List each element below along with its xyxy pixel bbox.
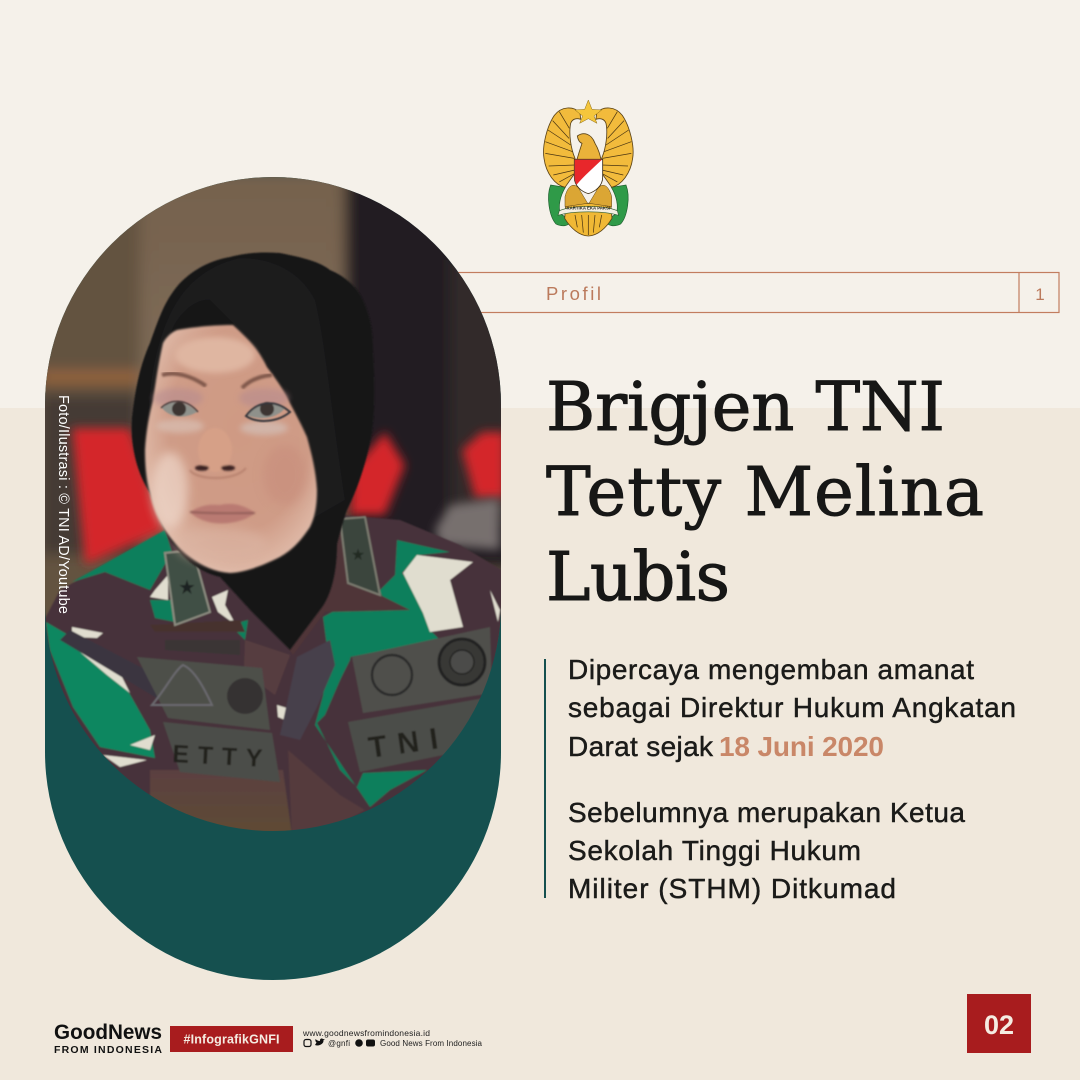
background: lower band xyxy=(0,408,1080,1080)
green capsule xyxy=(45,177,501,980)
rank insignia: right xyxy=(340,517,380,595)
eyebrows xyxy=(162,374,206,386)
uniform xyxy=(40,515,505,840)
icon: ribbon: KARTIKA EKA PAKSI xyxy=(567,205,610,210)
lips xyxy=(190,504,255,523)
hijab xyxy=(132,252,374,650)
left eye xyxy=(161,401,198,417)
page number: 02 xyxy=(984,1010,1014,1040)
icon: eagle head xyxy=(577,134,601,161)
nose xyxy=(189,464,246,480)
photo: portrait xyxy=(30,170,515,840)
name tape: TNI xyxy=(348,697,490,772)
forehead highlight xyxy=(175,337,255,373)
vertical rule xyxy=(544,659,546,898)
text block: current role: Dipercaya mengemban amanat xyxy=(568,654,974,685)
icon: right wing xyxy=(596,108,633,187)
photo credit: Foto/Ilustrasi : © TNI AD/Youtube xyxy=(55,395,71,614)
title: Lubis xyxy=(546,538,730,616)
collar xyxy=(244,640,290,695)
under-eye tone xyxy=(156,419,204,433)
text block: current role xyxy=(568,654,1016,762)
icon: left wing xyxy=(544,108,581,187)
icon: talons xyxy=(565,185,612,207)
handle: @gnfi xyxy=(328,1039,350,1048)
pocket patch with emblem: left xyxy=(137,640,270,730)
logo: GoodNews wordmark: GoodNews xyxy=(54,1021,162,1044)
name tape: TETTY xyxy=(163,722,280,782)
highlighted date: 18 Juni 2020 xyxy=(719,731,884,762)
label: Profil: Profil xyxy=(546,283,601,304)
text block: previous role xyxy=(568,797,965,904)
hashtag badge xyxy=(170,1026,293,1052)
camouflage: green xyxy=(46,530,450,812)
logo: army crest xyxy=(544,100,633,236)
text block: previous role: Militer (STHM) Ditkumad xyxy=(568,873,896,904)
icon: youtube xyxy=(366,1040,375,1046)
rank insignia: left xyxy=(165,550,210,625)
text block: previous role: Sekolah Tinggi Hukum xyxy=(568,835,861,866)
name tape: TNI: TNI xyxy=(366,723,440,765)
title xyxy=(546,368,984,616)
background: upper band xyxy=(0,0,1080,408)
profil bar xyxy=(440,272,1059,312)
chin shadow xyxy=(177,527,267,563)
logo: tagline: FROM INDONESIA xyxy=(54,1044,162,1056)
website: www.goodnewsfromindonesia.id xyxy=(302,1028,430,1038)
lower shirt xyxy=(150,770,292,835)
name tape: TETTY: ETTY xyxy=(172,740,263,773)
icon: star xyxy=(575,100,602,123)
person in background xyxy=(435,498,500,550)
text block: current role: Darat sejak xyxy=(568,731,714,762)
photo background xyxy=(30,170,515,650)
icon: shield xyxy=(574,159,603,194)
label: page 1: 1 xyxy=(1035,285,1045,304)
face xyxy=(145,325,317,573)
text block: current role: sebagai Direktur Hukum Angkatan xyxy=(568,692,1016,723)
title: Brigjen TNI xyxy=(546,368,945,446)
lower-left cheek highlight xyxy=(152,452,188,528)
red chairs xyxy=(72,428,505,565)
camouflage: cream xyxy=(72,555,500,767)
icon: instagram xyxy=(304,1040,311,1046)
title: Tetty Melina xyxy=(546,453,984,531)
text block: previous role: Sebelumnya merupakan Ketua xyxy=(568,797,965,828)
icon: twitter xyxy=(315,1039,325,1045)
rank insignia: left: ★ xyxy=(178,575,196,599)
cheek blush xyxy=(272,455,302,498)
eye shadows xyxy=(150,388,202,406)
icon: facebook xyxy=(355,1039,363,1047)
page name: Good News From Indonesia xyxy=(380,1039,483,1048)
social handles xyxy=(304,1039,483,1048)
icon: laurel xyxy=(548,185,628,226)
right eye xyxy=(246,402,290,421)
footer brand xyxy=(54,1021,483,1056)
icon: tail fan xyxy=(565,203,612,236)
camouflage: dark purple xyxy=(280,640,335,740)
pocket patch with emblem: right xyxy=(352,627,492,713)
hashtag badge: #InfografikGNFI xyxy=(184,1032,280,1046)
page number xyxy=(967,994,1031,1053)
rank insignia: right: ★ xyxy=(351,545,365,564)
